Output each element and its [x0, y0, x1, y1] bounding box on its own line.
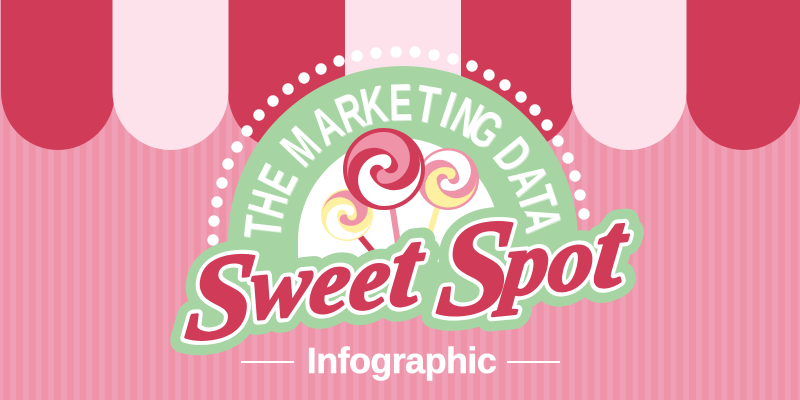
- title: Sweet Spot: S: [431, 190, 521, 345]
- title: Sweet Spot: S: [180, 227, 262, 367]
- arched heading: R: [328, 82, 373, 145]
- title: Sweet Spot: t: [384, 208, 430, 330]
- arched heading: [233, 74, 572, 242]
- title: Sweet Spot: S: [180, 227, 262, 367]
- arched heading: T: [233, 212, 293, 242]
- white arch window: [298, 138, 500, 262]
- arched heading: H: [237, 184, 300, 224]
- arched heading: G: [458, 98, 513, 161]
- arched heading: T: [411, 74, 444, 135]
- title: Sweet Spot: t: [588, 189, 634, 311]
- lollipop: pink medium: [417, 142, 479, 216]
- dotted marquee arc: [207, 46, 590, 246]
- arched heading: M: [270, 117, 332, 177]
- arched heading: A: [496, 155, 559, 204]
- arched heading: D: [482, 128, 543, 183]
- arched heading: A: [301, 94, 353, 156]
- arched heading: T: [505, 179, 568, 219]
- title: Sweet Spot: po: [492, 206, 600, 316]
- subtitle: Infographic: Infographic: [307, 340, 496, 381]
- arched heading: K: [356, 75, 392, 137]
- title: Sweet Spot: t: [384, 208, 430, 330]
- title: Sweet Spot: [180, 179, 636, 368]
- title: Sweet Spot: t: [588, 189, 634, 311]
- awning: [1, 0, 800, 150]
- arched heading: E: [247, 156, 309, 203]
- title: Sweet Spot: po: [492, 206, 600, 316]
- arched heading: A: [511, 203, 572, 237]
- green arch: [228, 66, 578, 296]
- title: Sweet Spot: t: [384, 208, 430, 330]
- arched heading: E: [389, 74, 413, 132]
- lollipop: yellow small: [320, 182, 374, 248]
- lollipop: red large: [343, 128, 425, 210]
- title: Sweet Spot: S: [180, 227, 262, 367]
- title: Sweet Spot: t: [588, 189, 634, 311]
- arched heading: N: [442, 87, 491, 150]
- title: Sweet Spot: wee: [245, 225, 396, 339]
- title: Sweet Spot: S: [431, 190, 521, 345]
- title: Sweet Spot: wee: [245, 225, 396, 339]
- title: Sweet Spot: po: [492, 206, 600, 316]
- title: Sweet Spot: S: [431, 190, 521, 345]
- lollipop sticks: [358, 205, 438, 258]
- title: Sweet Spot: wee: [245, 225, 396, 339]
- arched heading: I: [434, 80, 462, 139]
